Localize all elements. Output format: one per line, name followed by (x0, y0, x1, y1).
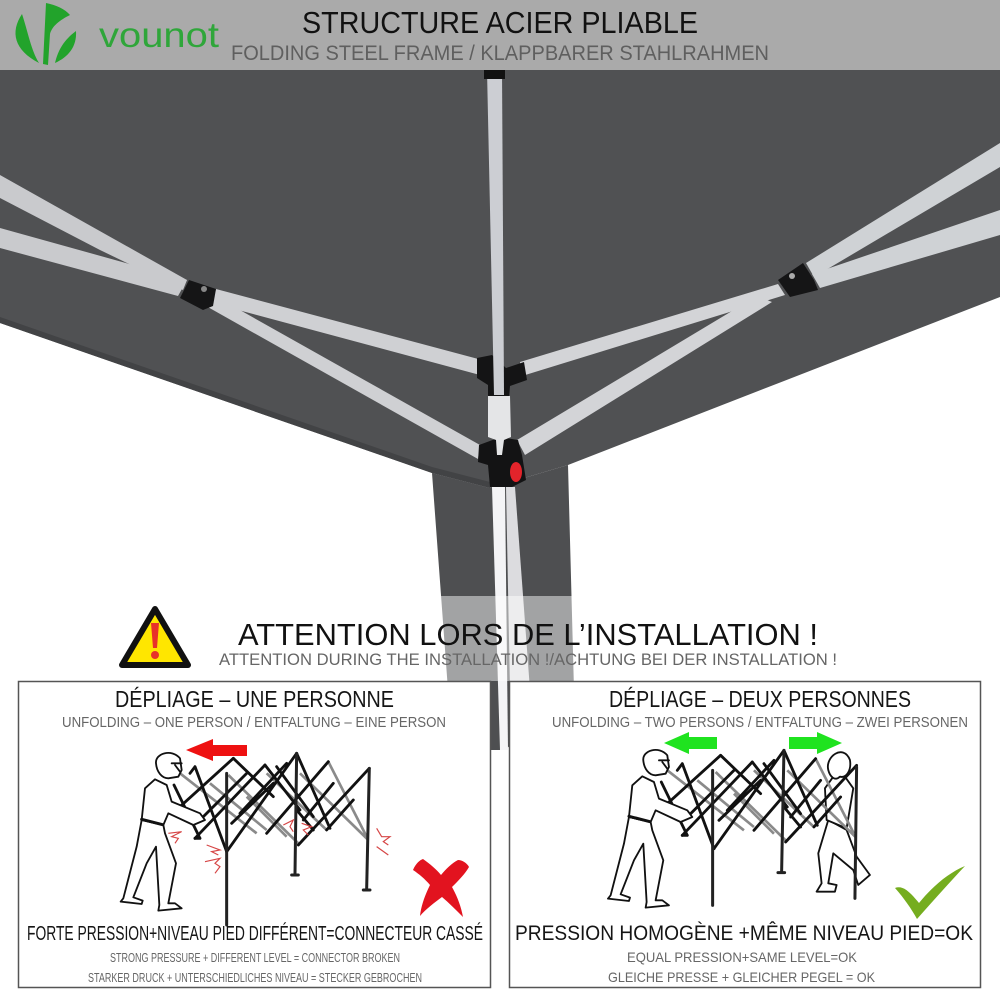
illustration: two persons unfolding frame (608, 750, 870, 908)
logo (15, 3, 219, 65)
centre pole upper (487, 70, 504, 395)
translucent header band (0, 0, 1000, 70)
attention heading: ATTENTION LORS DE L’INSTALLATION ! (238, 617, 818, 652)
woman (817, 752, 870, 892)
subtitle: FOLDING STEEL FRAME / KLAPPBARER STAHLRAHMEN (231, 42, 769, 65)
detail line english: EQUAL PRESSION+SAME LEVEL=OK (627, 949, 858, 965)
right struts outer (806, 143, 1000, 288)
icon: warning triangle (122, 609, 188, 665)
white band over attention row (0, 596, 1000, 681)
statement one person: FORTE PRESSION+NIVEAU PIED DIFFÉRENT=CONNECTEUR CASSÉ (27, 922, 483, 945)
subheading one person: UNFOLDING – ONE PERSON / ENTFALTUNG – EINE PERSON (62, 715, 446, 731)
detail line german: STARKER DRUCK + UNTERSCHIEDLICHES NIVEAU = STECKER GEBROCHEN (88, 970, 422, 985)
canopy valance shading (0, 317, 490, 488)
left struts inner (206, 289, 482, 459)
logo wordmark: vounot (99, 16, 219, 55)
heading two persons: DÉPLIAGE – DEUX PERSONNES (609, 686, 911, 712)
title: STRUCTURE ACIER PLIABLE (302, 5, 698, 40)
pole top cap (484, 70, 505, 79)
icon: green arrow right (789, 732, 842, 754)
heading one person: DÉPLIAGE – UNE PERSONNE (115, 686, 394, 712)
tent leg fabric (432, 465, 574, 750)
lower centre bracket (478, 438, 526, 487)
canopy photo background (0, 0, 1000, 750)
upper centre bracket (477, 355, 527, 398)
attention subheading: ATTENTION DURING THE INSTALLATION !/ACHTUNG BEI DER INSTALLATION ! (219, 650, 837, 669)
detail line german: GLEICHE PRESSE + GLEICHER PEGEL = OK (608, 969, 876, 985)
centre pole lower (492, 487, 508, 750)
icon: red arrow left (186, 739, 247, 761)
detail line english: STRONG PRESSURE + DIFFERENT LEVEL = CONNECTOR BROKEN (110, 950, 400, 965)
icon: logo leaves (15, 3, 76, 65)
left struts outer (0, 175, 187, 296)
canopy fabric (0, 0, 1000, 488)
icon: green check mark (895, 866, 965, 919)
panel: one person (18, 682, 490, 988)
connector left (180, 280, 216, 310)
panel: two persons (510, 682, 980, 988)
icon: green arrow left (664, 732, 717, 754)
red knob (510, 462, 522, 482)
icon: red cross (413, 859, 469, 917)
right struts inner (517, 284, 785, 455)
connector right (778, 263, 818, 297)
subheading two persons: UNFOLDING – TWO PERSONS / ENTFALTUNG – ZWEI PERSONEN (552, 715, 968, 731)
illustration: one person unfolding frame (121, 753, 390, 925)
